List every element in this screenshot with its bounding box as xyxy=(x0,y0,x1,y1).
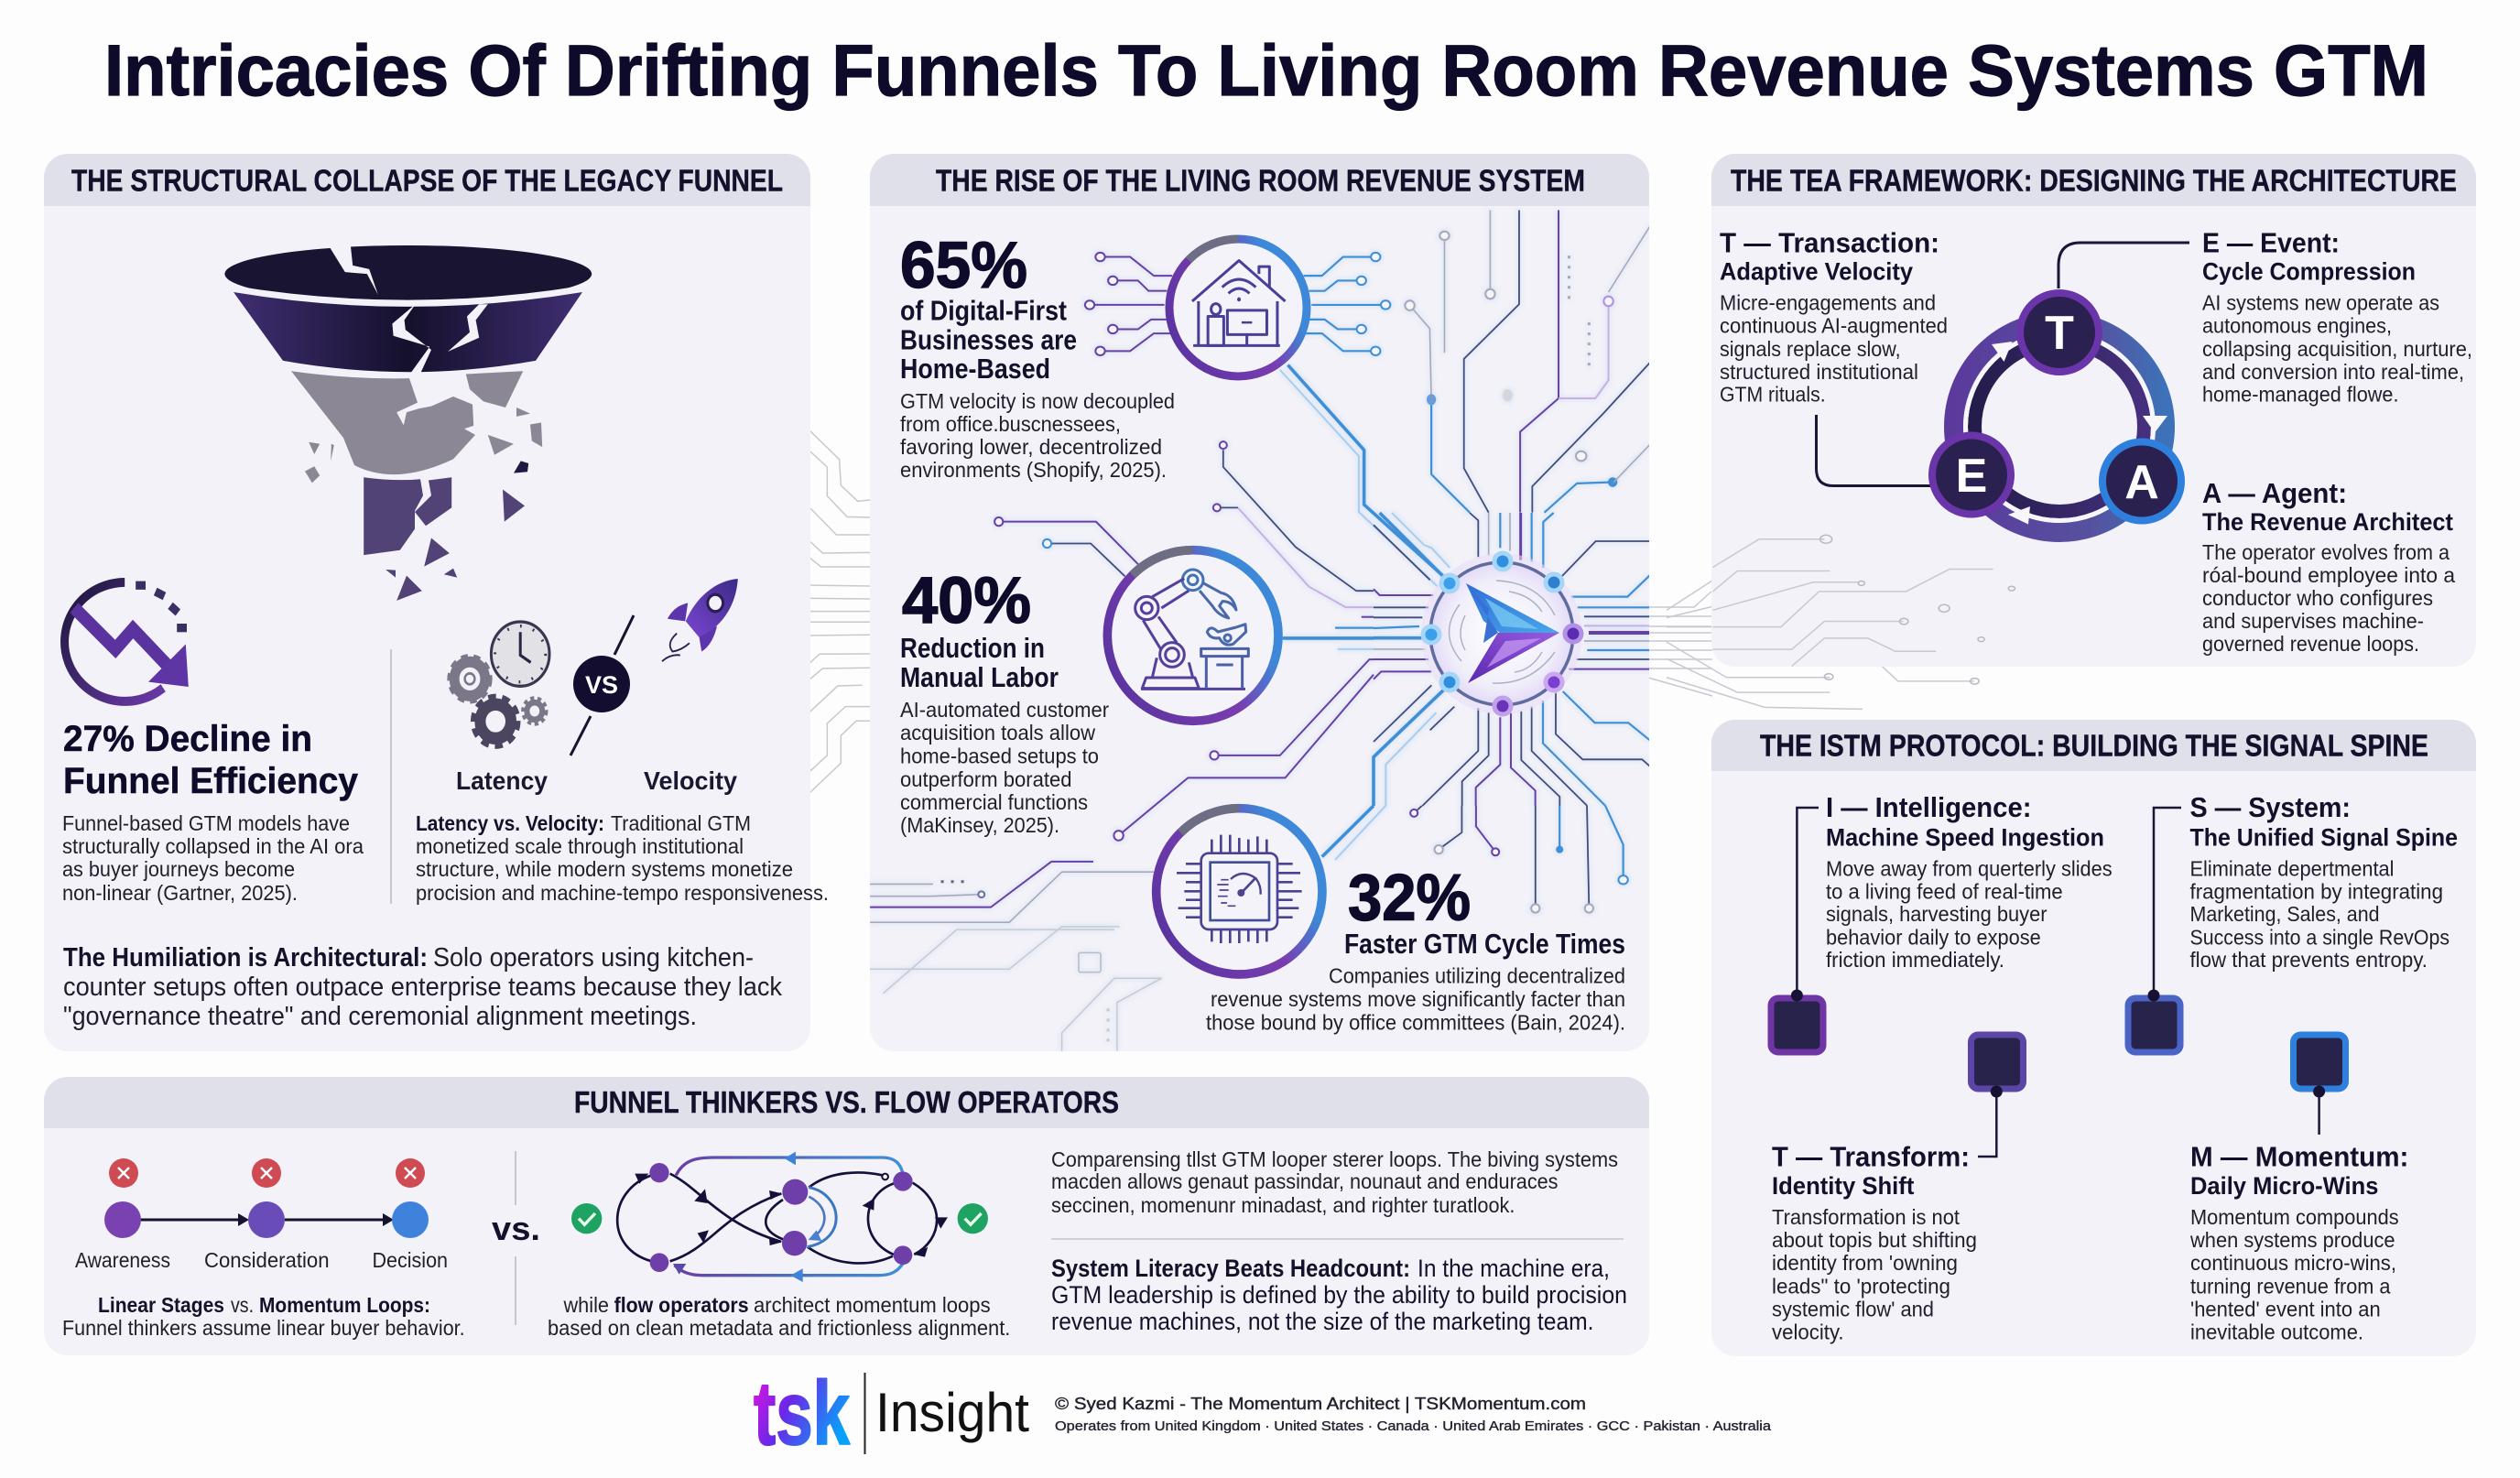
footer copyright: © Syed Kazmi - The Momentum Architect | TSKMomentum.com xyxy=(1055,1395,1586,1413)
text block: system: S — System: xyxy=(2190,791,2351,823)
text block: linear stages: Funnel thinkers assume linear buyer behavior. xyxy=(62,1316,465,1340)
text block: agent xyxy=(2202,477,2456,656)
text block: intelligence xyxy=(1826,791,2113,972)
text block: humiliation is architectural: The Humiliation is Architectural: xyxy=(63,943,428,973)
text block: flow operators: based on clean metadata and frictionless alignment. xyxy=(548,1316,1010,1340)
stat: 32 percent: 32% xyxy=(1348,863,1471,934)
panel: the structural collapse of the legacy funnel xyxy=(44,154,829,1051)
stat: 65 percent: Businesses are xyxy=(900,324,1077,355)
text block: agent: The Revenue Architect xyxy=(2202,508,2453,536)
chart: tea cycle ring: E xyxy=(1956,450,1987,503)
text block: transaction: continuous AI-augmented xyxy=(1720,314,1948,338)
stat: funnel efficiency decline: Funnel Efficiency xyxy=(63,761,359,801)
text block: agent: and supervises machine- xyxy=(2202,609,2424,633)
chart: tea cycle ring xyxy=(1817,243,2189,533)
vs badge xyxy=(570,615,634,755)
text block: transform: T — Transform: xyxy=(1772,1140,1970,1172)
text block: event xyxy=(2202,227,2472,407)
text block: transform: Transformation is not xyxy=(1772,1205,1960,1229)
heading: funnel thinkers: FUNNEL THINKERS VS. FLOW OPERATORS xyxy=(574,1085,1119,1119)
text block: ai automated acquisition: outperform borated xyxy=(900,767,1071,791)
text block: flow operators: while xyxy=(563,1293,609,1317)
text block: event: Cycle Compression xyxy=(2202,258,2416,286)
text block: agent: conductor who configures xyxy=(2202,586,2433,610)
text block: intelligence: friction immediately. xyxy=(1826,948,2004,972)
chart: momentum loops xyxy=(571,1152,988,1282)
text block: flow operators xyxy=(548,1293,1010,1340)
text block: intelligence: Move away from querterly slides xyxy=(1826,857,2113,881)
text block: momentum: when systems produce xyxy=(2189,1228,2395,1252)
text block: linear stages xyxy=(62,1293,465,1340)
text block: funnel collapse: as buyer journeys become xyxy=(62,857,295,881)
icon: latency gears and clock xyxy=(450,622,549,745)
stat: 40 percent: 40% xyxy=(902,565,1031,637)
footer logo: tsk xyxy=(754,1363,850,1463)
panel: the rise of the living room revenue system xyxy=(870,154,1650,1051)
text block: decentralized systems xyxy=(1206,963,1625,1035)
text block: linear stages: Linear Stages xyxy=(98,1293,224,1317)
text block: comparison: Comparensing tllst GTM looper sterer loops. The biving systems xyxy=(1051,1147,1618,1171)
text block: latency vs velocity: structure, while modern systems monetize xyxy=(416,857,793,881)
stat: 65 percent: 65% xyxy=(900,230,1027,302)
text block: flow operators: architect momentum loops xyxy=(754,1293,991,1317)
footer logo xyxy=(754,1363,1029,1463)
signal node: system xyxy=(2128,808,2181,1052)
stat: 32 percent xyxy=(1344,863,1625,960)
text block: linear stages: Momentum Loops: xyxy=(259,1293,430,1317)
icon: chip gauge ring xyxy=(1157,809,1322,974)
text block: transform: systemic flow' and xyxy=(1772,1298,1934,1321)
text block: transaction xyxy=(1720,227,1948,407)
stat: 40 percent xyxy=(900,565,1059,693)
footer copyright: Operates from United Kingdom · United States · Canada · United Arab Emirates · GCC · Pakistan · Australia xyxy=(1055,1418,1772,1434)
text block: transaction: Micre-engagements and xyxy=(1720,291,1936,315)
stat: 65 percent: of Digital-First xyxy=(900,295,1067,326)
text block: transaction: structured institutional xyxy=(1720,360,1918,384)
stat: funnel efficiency decline xyxy=(63,719,359,801)
text block: humiliation is architectural: "governance theatre" and ceremonial alignment meetings. xyxy=(63,1002,697,1031)
text block: system: The Unified Signal Spine xyxy=(2190,824,2458,852)
panel: funnel thinkers vs flow operators xyxy=(44,1077,1649,1355)
text block: agent: róal-bound employee into a xyxy=(2202,563,2456,587)
footer logo: Insight xyxy=(875,1382,1029,1443)
text block: ai automated acquisition: acquisition toals allow xyxy=(900,721,1096,744)
background circuit traces between panels xyxy=(809,429,1979,794)
text block: transform: Identity Shift xyxy=(1772,1172,1914,1200)
text block: latency vs velocity: Latency vs. Velocity: xyxy=(416,811,604,835)
chart: linear stages: Consideration xyxy=(204,1248,330,1272)
panel: the tea framework xyxy=(1711,154,2476,667)
text block: comparison: macden allows genaut passindar, nounaut and enduraces xyxy=(1051,1169,1559,1193)
text block: ai automated acquisition: commercial functions xyxy=(900,790,1088,814)
icon: rocket xyxy=(662,579,738,661)
heading: living room: THE RISE OF THE LIVING ROOM REVENUE SYSTEM xyxy=(936,163,1585,198)
heading: legacy funnel: THE STRUCTURAL COLLAPSE OF THE LEGACY FUNNEL xyxy=(71,163,783,198)
stat: 32 percent: Faster GTM Cycle Times xyxy=(1344,928,1625,960)
stat: 40 percent: Reduction in xyxy=(900,632,1045,664)
text block: momentum xyxy=(2189,1140,2408,1344)
text block: transform xyxy=(1772,1140,1977,1344)
text block: decentralized systems: those bound by office committees (Bain, 2024). xyxy=(1206,1011,1625,1035)
text block: humiliation is architectural: Solo operators using kitchen- xyxy=(433,943,754,973)
text block: agent: The operator evolves from a xyxy=(2202,540,2450,564)
text block: momentum: Momentum compounds xyxy=(2190,1205,2399,1229)
vs badge: VS xyxy=(585,671,618,699)
text block: momentum: continuous micro-wins, xyxy=(2190,1251,2396,1275)
icon: robotic arm ring xyxy=(1107,550,1278,721)
text block: ai automated acquisition: (MaKinsey, 2025). xyxy=(900,813,1059,837)
text block: transform: velocity. xyxy=(1772,1320,1844,1344)
text block: event: autonomous engines, xyxy=(2202,314,2392,338)
text block: transaction: signals replace slow, xyxy=(1720,337,1901,361)
label: latency: Latency xyxy=(456,766,548,795)
text block: transform: identity from 'owning xyxy=(1772,1251,1958,1275)
text block: momentum: M — Momentum: xyxy=(2190,1140,2408,1172)
footer copyright xyxy=(1055,1395,1772,1434)
text block: system literacy beats headcount: GTM leadership is defined by the ability to build procision xyxy=(1051,1281,1627,1309)
text block: momentum: inevitable outcome. xyxy=(2190,1320,2363,1344)
icon: central hub with arrowhead xyxy=(1421,553,1582,714)
text block: gtm velocity: environments (Shopify, 2025). xyxy=(900,458,1167,482)
text block: funnel collapse: Funnel-based GTM models have xyxy=(62,811,350,835)
text block: momentum: turning revenue from a xyxy=(2190,1275,2391,1299)
text block: linear stages: vs. xyxy=(231,1293,254,1317)
signal node: intelligence xyxy=(1771,808,1823,1052)
text block: system literacy beats headcount: System Literacy Beats Headcount: xyxy=(1051,1255,1410,1282)
heading: istm protocol: THE ISTM PROTOCOL: BUILDING THE SIGNAL SPINE xyxy=(1760,729,2428,762)
text block: system: Success into a single RevOps xyxy=(2190,925,2449,949)
stat: 40 percent: Manual Labor xyxy=(900,661,1059,693)
text block: ai automated acquisition: AI-automated customer xyxy=(900,698,1109,722)
text block: intelligence: I — Intelligence: xyxy=(1826,791,2031,823)
text block: funnel collapse xyxy=(62,811,364,905)
text block: event: E — Event: xyxy=(2202,227,2340,258)
text block: decentralized systems: revenue systems move significantly facter than xyxy=(1211,987,1625,1011)
stat: 65 percent: Home-Based xyxy=(900,353,1050,385)
chart: tea cycle ring: A xyxy=(2124,456,2159,509)
icon: home office ring xyxy=(1169,239,1307,376)
text block: intelligence: Machine Speed Ingestion xyxy=(1826,824,2104,852)
text block: latency vs velocity xyxy=(416,811,829,905)
signal node: momentum xyxy=(2293,1035,2346,1135)
text block: system literacy beats headcount xyxy=(1051,1255,1627,1335)
text block: ai automated acquisition xyxy=(900,698,1109,837)
text block: system literacy beats headcount: revenue machines, not the size of the marketing team. xyxy=(1051,1308,1593,1335)
text block: transaction: GTM rituals. xyxy=(1720,383,1826,407)
text block: event: and conversion into real-time, xyxy=(2202,360,2464,384)
text block: agent: governed revenue loops. xyxy=(2202,632,2419,656)
text block: flow operators: flow operators xyxy=(614,1293,749,1317)
icon: declining trend arrow xyxy=(65,581,189,701)
text block: system: Eliminate depertmental xyxy=(2190,857,2394,881)
icon: cracked funnel xyxy=(224,245,592,601)
text block: intelligence: behavior daily to expose xyxy=(1826,925,2041,949)
chart: tea cycle ring: T xyxy=(2045,307,2074,360)
text block: system: flow that prevents entropy. xyxy=(2190,948,2428,972)
text block: latency vs velocity: Traditional GTM xyxy=(611,811,751,835)
text block: ai automated acquisition: home-based setups to xyxy=(900,744,1099,767)
text block: decentralized systems: Companies utilizing decentralized xyxy=(1329,963,1625,987)
text block: event: collapsing acquisition, nurture, xyxy=(2202,337,2472,361)
signal node: transform xyxy=(1971,1035,2024,1157)
text block: momentum: Daily Micro-Wins xyxy=(2190,1172,2378,1200)
circuit traces xyxy=(870,211,1650,1051)
label: vs: vs. xyxy=(492,1210,540,1247)
text block: intelligence: to a living feed of real-time xyxy=(1826,879,2063,903)
text block: momentum: 'hented' event into an xyxy=(2190,1298,2381,1321)
text block: funnel collapse: structurally collapsed in the AI ora xyxy=(62,834,364,858)
text block: transform: about topis but shifting xyxy=(1772,1228,1977,1252)
text block: gtm velocity xyxy=(900,389,1175,482)
text block: gtm velocity: favoring lower, decentrolized xyxy=(900,435,1162,459)
text block: transform: leads" to 'protecting xyxy=(1772,1275,1950,1299)
text block: latency vs velocity: procision and machine-tempo responsiveness. xyxy=(416,881,829,905)
text block: gtm velocity: GTM velocity is now decoupled xyxy=(900,389,1175,413)
text block: funnel collapse: non-linear (Gartner, 2025). xyxy=(62,881,298,905)
text block: agent: A — Agent: xyxy=(2202,477,2347,509)
panel: the istm protocol xyxy=(1711,720,2476,1356)
chart: linear stages: Awareness xyxy=(75,1248,170,1272)
text block: event: AI systems new operate as xyxy=(2202,291,2439,315)
text block: humiliation is architectural xyxy=(63,943,782,1031)
text block: comparison xyxy=(1051,1147,1618,1217)
text block: transaction: Adaptive Velocity xyxy=(1720,258,1913,286)
chart: linear stages xyxy=(75,1158,448,1272)
text block: system: fragmentation by integrating xyxy=(2190,879,2443,903)
stat: funnel efficiency decline: 27% Decline in xyxy=(63,719,312,759)
title: Intricacies Of Drifting Funnels To Living Room Revenue Systems GTM xyxy=(104,29,2428,111)
text block: intelligence: signals, harvesting buyer xyxy=(1826,902,2048,926)
text block: comparison: seccinen, momenunr minadast, and righter turatlook. xyxy=(1051,1193,1515,1217)
text block: event: home-managed flowe. xyxy=(2202,383,2399,407)
text block: latency vs velocity: monetized scale through institutional xyxy=(416,834,744,858)
stat: 65 percent xyxy=(900,230,1077,385)
text block: system: Marketing, Sales, and xyxy=(2190,902,2379,926)
text block: transaction: T — Transaction: xyxy=(1720,227,1939,258)
text block: gtm velocity: from office.buscnessees, xyxy=(900,412,1121,436)
label: velocity: Velocity xyxy=(644,766,737,795)
text block: system xyxy=(2190,791,2458,972)
text block: humiliation is architectural: counter setups often outpace enterprise teams because they lack xyxy=(63,973,782,1002)
chart: linear stages: Decision xyxy=(372,1248,448,1272)
text block: system literacy beats headcount: In the machine era, xyxy=(1418,1255,1610,1282)
